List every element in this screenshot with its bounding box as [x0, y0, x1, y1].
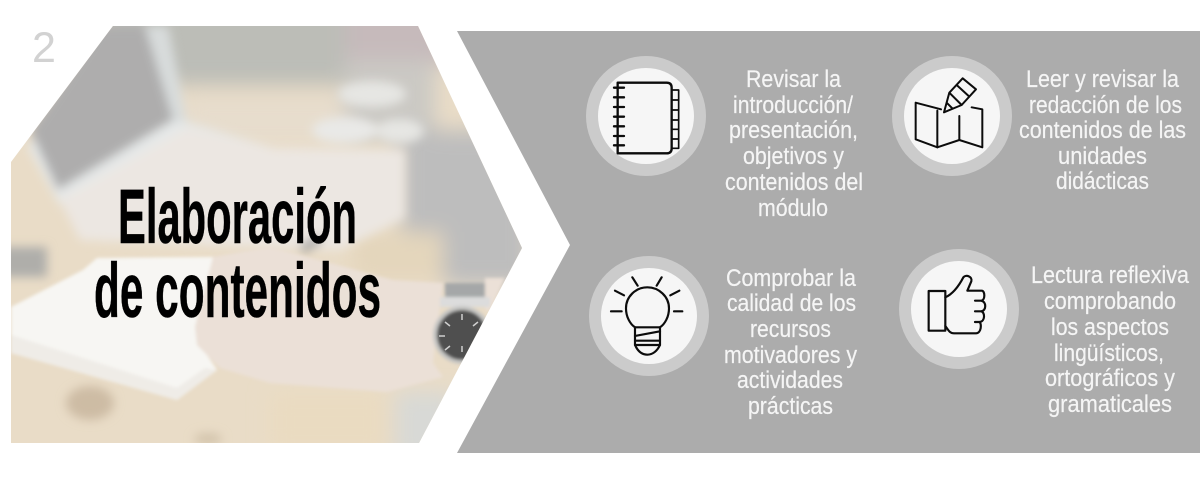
text: leer: unidades [1058, 143, 1147, 170]
text: leer [1019, 66, 1186, 195]
panel: gray chevron [457, 31, 1200, 453]
text: lectura: gramaticales [1048, 391, 1172, 418]
icon: thumbs up [929, 276, 985, 333]
title: Elaboración [118, 174, 357, 260]
title: de contenidos [94, 248, 381, 334]
text: revisar: presentación, [729, 117, 858, 144]
text: comprobar: Comprobar la [726, 265, 857, 292]
text: revisar [725, 66, 863, 222]
text: comprobar: recursos [750, 316, 831, 343]
number 2: 2 [32, 24, 56, 72]
text: revisar: introducción/ [733, 92, 853, 119]
text: comprobar [724, 265, 857, 420]
text: leer: didácticas [1056, 168, 1149, 195]
text: comprobar: actividades [737, 367, 843, 394]
text: leer: redacción de los [1029, 92, 1182, 119]
title [94, 174, 381, 334]
text: revisar: módulo [758, 195, 828, 222]
item: lectura reflexiva [899, 249, 1190, 418]
text: lectura: ortográficos y [1045, 365, 1175, 392]
text: comprobar: calidad de los [727, 290, 856, 317]
text: lectura: comprobando [1044, 288, 1176, 315]
text: lectura: lingüísticos, [1054, 340, 1164, 367]
item: leer y revisar [892, 56, 1186, 195]
text: lectura: los aspectos [1051, 314, 1169, 341]
text: leer: Leer y revisar la [1026, 66, 1180, 93]
item: revisar introducción [586, 56, 863, 222]
text: revisar: contenidos del [725, 169, 863, 196]
icon: light bulb [611, 277, 682, 355]
icon: notebook [614, 83, 679, 153]
panel: hexagonal faded desk photo [11, 26, 522, 443]
text: lectura [1031, 262, 1190, 418]
text: comprobar: motivadores y [724, 342, 857, 369]
text: comprobar: prácticas [748, 393, 833, 420]
item: comprobar calidad [589, 256, 857, 420]
icon: map with pencil [916, 78, 982, 147]
text: revisar: Revisar la [746, 66, 842, 93]
text: revisar: objetivos y [743, 143, 844, 170]
